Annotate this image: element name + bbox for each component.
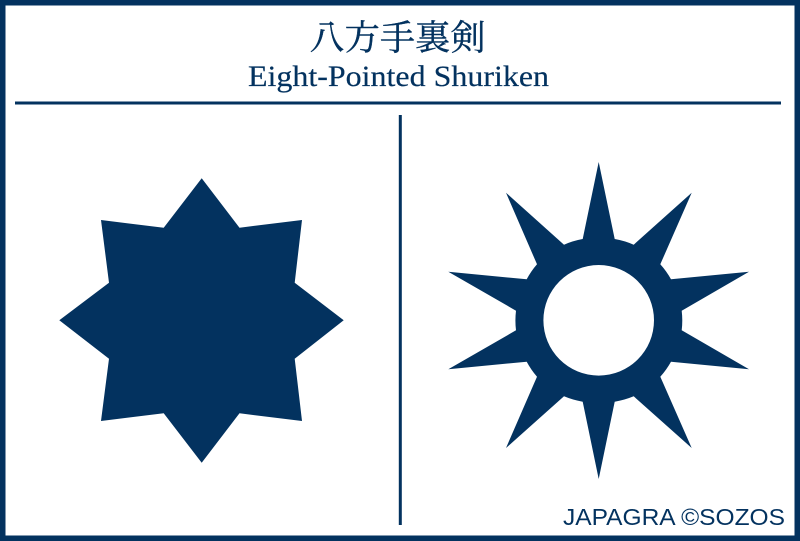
header divider (15, 102, 781, 104)
icon: twelve-pointed ring shuriken (448, 162, 749, 479)
icon: solid eight-pointed shuriken (59, 178, 344, 463)
center divider (399, 115, 402, 525)
subtitle: English: Eight-Pointed Shuriken (248, 60, 549, 93)
title: Japanese: 八方手裏剣 (310, 19, 486, 58)
credit: JAPAGRA ©SOZOS (563, 504, 785, 530)
